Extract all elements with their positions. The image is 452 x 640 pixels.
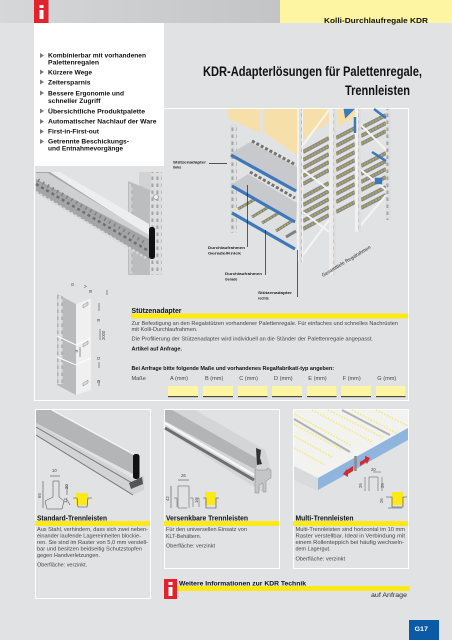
callouts: rack labels: rechts (258, 296, 269, 300)
panel: feature list: schneller Zugriff (48, 98, 101, 105)
panel: Multi-Trennleisten (293, 410, 408, 568)
diagram: standard profile: 10 (52, 468, 57, 473)
diagram: multi profile: 26 (380, 483, 385, 488)
callouts: rack labels: Gerade/Knick (208, 252, 241, 256)
diagram: recessed profile (165, 473, 219, 508)
section: Stützenadapter (131, 306, 408, 372)
text block: KLT-Behältern. (166, 534, 201, 540)
table: dimensions form: B (mm) (205, 376, 223, 382)
panel: feature list: Kombinierbar mit vorhandenen (48, 52, 146, 60)
image: multi divider deck (294, 410, 408, 491)
panel: feature list: Getrennte Beschickungs- (48, 138, 129, 146)
diagram: standard profile: 65 (37, 493, 42, 498)
table: dimensions form: E (mm) (308, 376, 327, 382)
panel: feature list: Übersichtliche Produktpalette (48, 106, 145, 116)
diagram: multi profile: 20 (371, 467, 376, 472)
section: Stützenadapter: Artikel auf Anfrage. (132, 346, 182, 352)
bar: heading (35, 521, 150, 526)
text block (296, 527, 405, 563)
diagram: adapter dimensions: D (96, 357, 101, 360)
panel: feature list: Zeitersparnis (48, 80, 91, 86)
text block: bar und besitzen beidseitig Schutzstopfen (37, 546, 142, 552)
page number (409, 620, 439, 640)
diagram: adapter dimensions: 2000 (101, 330, 106, 340)
icon: info red box (34, 0, 48, 23)
table: dimensions form: F (mm) (343, 376, 361, 382)
text block (37, 527, 148, 568)
panel: feature list: Palettenregalen (48, 60, 99, 66)
text block: ren. Sie sind im Raster von 5,0 mm verstell- (37, 540, 148, 546)
callout: further information (164, 579, 410, 599)
diagram: multi profile: 26 (379, 498, 384, 503)
text block: einander laufende Lagereinheiten blockie- (37, 534, 141, 540)
page number: G17 (414, 626, 428, 633)
section: Stützenadapter: Bei Anfrage bitte folgende Maße und vorhandenes Regalfabrikat/-typ angeben: (132, 366, 334, 372)
text block: Oberfläche: verzinkt. (37, 562, 87, 568)
panel: feature list: Bessere Ergonomie und (48, 90, 124, 98)
blue frames (231, 155, 296, 249)
panel: feature list: Automatischer Nachlauf der Ware (48, 118, 157, 126)
panel: Versenkbare Trennleisten (164, 410, 280, 568)
table: dimensions form: A (mm) (170, 376, 188, 382)
diagram: adapter dimensions: B (88, 290, 93, 293)
header title: Kolli-Durchlaufregale KDR (324, 16, 429, 25)
diagram: adapter dimensions: G (70, 283, 75, 286)
callouts: rack labels: Gerade (225, 278, 237, 282)
callouts: rack labels: links (173, 166, 181, 170)
callouts: rack labels: Stützenadapter (258, 291, 293, 295)
text block (166, 527, 247, 550)
callout: further information: Weitere Informationen zur KDR Technik (179, 580, 306, 588)
diagram: multi profile (358, 467, 407, 508)
roller shelf (231, 201, 297, 250)
table: dimensions form: Maße (132, 376, 146, 382)
diagram: standard profile: 20 (64, 484, 69, 489)
section: Stützenadapter: mit Kolli-Durchlaufrahmen. (132, 327, 198, 333)
diagram: adapter dimensions: E (96, 319, 101, 322)
title (203, 64, 422, 98)
panel: Versenkbare Trennleisten: Versenkbare Trennleisten (166, 516, 248, 522)
callouts: rack labels: Durchlaufrahmen (225, 272, 262, 276)
text block: Multi-Trennleisten sind horizontal im 10 mm (296, 527, 405, 533)
panel: feature list: First-in-First-out (48, 128, 100, 136)
title: Trennleisten (345, 83, 410, 98)
panel: Standard-Trennleisten (35, 410, 150, 598)
panel: feature list: und Entnahmevorgänge (48, 146, 123, 152)
pallet boxes (228, 109, 355, 155)
diagram: recessed profile: 26 (181, 473, 186, 478)
diagram: adapter dimensions: A (83, 285, 88, 288)
diagram: standard profile (37, 468, 92, 509)
panel: feature list: Kürzere Wege (48, 70, 92, 76)
section: Stützenadapter: Die Profilierung der Stützenadapter wird individuell an die Ständer der Palettenregale angepasst. (132, 336, 373, 342)
diagram: recessed profile: 16 (194, 498, 199, 503)
callouts: rack labels: Gesamttiefe Regalrahmen (321, 245, 372, 279)
illustration: rail adapter (36, 172, 162, 275)
callouts: rack labels: Durchlaufrahmen (208, 246, 245, 250)
text block: Für den universellen Einsatz von (166, 527, 247, 533)
illustration: pallet rack (228, 109, 391, 275)
image: standard divider (36, 410, 144, 495)
diagram: adapter dimensions: F (74, 350, 79, 353)
text block: Oberfläche: verzinkt (166, 544, 215, 550)
diagram: recessed profile: 42 (165, 496, 170, 501)
diagram: standard profile: 12 (63, 498, 68, 503)
text block: gegen Handverletzungen. (37, 553, 100, 559)
table: dimensions form: G (mm) (377, 376, 396, 382)
bar: heading (164, 521, 279, 526)
text block: Aus Stahl, verhindern, dass sich zwei neben- (37, 527, 148, 533)
table: dimensions form (132, 376, 406, 397)
callout: further information: auf Anfrage (371, 592, 407, 599)
diagram: adapter dimensions: C (96, 380, 101, 383)
callouts: rack labels: Stützenadapter (173, 160, 207, 164)
plate shelves (230, 142, 297, 192)
panel: Multi-Trennleisten: Multi-Trennleisten (296, 516, 354, 522)
text block: Raster verstellbar. Ideal in Verbindung mit (296, 534, 405, 540)
text block: dem Lagergut. (296, 546, 331, 552)
table: dimensions form: C (mm) (239, 376, 258, 382)
bar: heading (293, 521, 408, 526)
uprights (230, 124, 237, 233)
section: Stützenadapter: Stützenadapter (132, 306, 182, 315)
table: dimensions form: D (mm) (274, 376, 293, 382)
diagram: adapter dimensions (57, 283, 107, 395)
text block: Oberfläche: verzinkt (296, 557, 345, 563)
diagram: multi profile: 26 (358, 483, 363, 488)
text block: einem Rollenteppich bei häufig wechseln- (296, 540, 404, 546)
panel: Standard-Trennleisten: Standard-Trennleisten (37, 516, 107, 522)
image: recessed divider (165, 410, 271, 493)
callouts: rack labels (173, 160, 372, 300)
panel: white frame lines (34, 108, 408, 400)
roller bays (303, 115, 386, 229)
header band (0, 0, 452, 25)
section: Stützenadapter: Zur Befestigung an den Regalstützen vorhandener Palettenregale. Für einfaches und schnelles Nachrüsten (132, 321, 398, 327)
panel: feature list (34, 23, 164, 166)
